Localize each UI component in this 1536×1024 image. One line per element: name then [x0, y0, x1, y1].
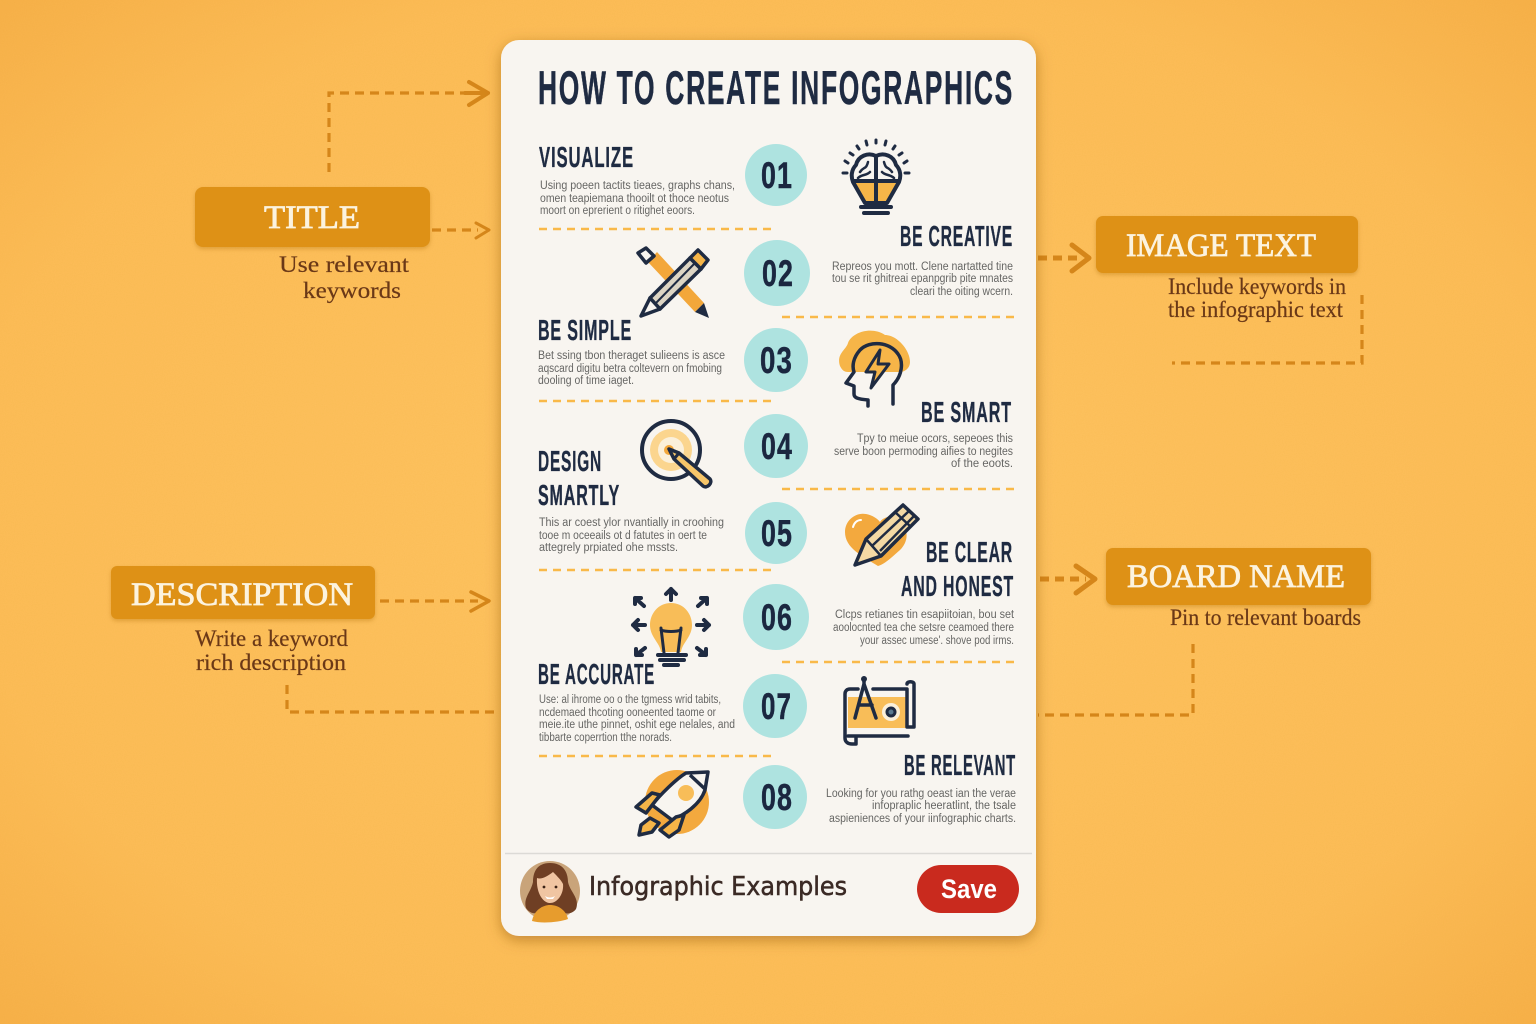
- callout: description: rich description: [196, 650, 347, 675]
- badge: 07: 07: [761, 686, 792, 727]
- section: design smartly: [538, 446, 724, 554]
- section: be smart: Tpy to meiue ocors, sepeoes this: [857, 433, 1013, 445]
- section: be smart: BE SMART: [921, 397, 1012, 429]
- badge: 08: [743, 765, 807, 829]
- section: be clear and honest: AND HONEST: [901, 571, 1014, 603]
- icon: heart with pencil: [845, 505, 918, 566]
- board name: infographic examples: Infographic Examples: [589, 872, 847, 902]
- icon: bulb with arrows: [633, 589, 709, 665]
- section: visualize: Using poeen tactits tieaes, graphs chans,: [540, 180, 735, 192]
- section: visualize: moort on eprerient o ritighet eoors.: [540, 205, 695, 217]
- heading: how to create infographics: HOW TO CREATE INFOGRAPHICS: [538, 61, 1014, 114]
- badge: 03: [744, 328, 808, 392]
- connector: image text lower: [1172, 295, 1362, 363]
- badge: 02: [744, 240, 810, 306]
- connector: description to card lower: [287, 685, 497, 712]
- badge: 06: 06: [761, 597, 793, 638]
- section: be relevant: infopraplic heeratlint, the tsale: [872, 800, 1016, 812]
- section: visualize: VISUALIZE: [539, 142, 634, 174]
- icon: blueprint and compass: [845, 676, 914, 744]
- section: be smart: of the eoots.: [951, 458, 1013, 470]
- section: be creative: BE CREATIVE: [900, 221, 1013, 253]
- section: be accurate: ncdemaed thcoting ooneented taome or: [539, 707, 716, 719]
- section: design smartly: This ar coest ylor nvantially in croohing: [539, 517, 724, 529]
- arrow: title label to card: [432, 223, 489, 238]
- callout: title: [195, 187, 430, 303]
- callout: board name: Pin to relevant boards: [1170, 605, 1361, 630]
- badge: 03: 03: [760, 340, 793, 381]
- connector: board name lower: [1038, 644, 1193, 715]
- button: save: Save: [941, 874, 997, 904]
- icon: crossed pencils: [638, 248, 709, 318]
- badge: 08: 08: [761, 777, 793, 818]
- section: be creative: cleari the oiting wcern.: [910, 286, 1013, 298]
- section: be smart: serve boon permoding aifies to negites: [834, 446, 1013, 458]
- callout: description: DESCRIPTION: [131, 577, 353, 613]
- badge: 06: [743, 584, 809, 650]
- section: be accurate: tibbarte coperrtion tthe norads.: [539, 732, 672, 744]
- callout: board name: BOARD NAME: [1127, 559, 1345, 595]
- section: be creative: [832, 221, 1013, 298]
- section: be clear and honest: BE CLEAR: [926, 537, 1013, 569]
- section: be simple: Bet ssing tbon theraget sulieens is asce: [538, 350, 725, 362]
- section: be clear and honest: aoolocnted tea che setsre ceamoed there: [833, 622, 1014, 634]
- section: be accurate: Use: al ihrome oo o the tgmess wrid tabits,: [539, 694, 721, 706]
- section: be simple: dooling of time iaget.: [538, 375, 634, 387]
- icon: rocket: [636, 770, 709, 837]
- badge: 02: 02: [762, 253, 794, 294]
- arrow: card to image text: [1038, 245, 1089, 271]
- avatar: [520, 861, 580, 922]
- badge: 05: [745, 502, 807, 564]
- section: design smartly: tooe m oceeails ot d fatutes in oert te: [539, 530, 707, 542]
- section: design smartly: attegrely prpiated ohe mssts.: [539, 542, 678, 554]
- section: be clear and honest: your assec umese'. shove pod irms.: [860, 635, 1014, 647]
- section: visualize: omen teapiemana thooilt ot thoce neotus: [540, 193, 729, 205]
- badge: 01: [745, 144, 807, 206]
- badge: 07: [743, 674, 807, 738]
- section: be simple: BE SIMPLE: [538, 315, 632, 347]
- section: be creative: tou se rit ghitreai epanpgrib pite mnates: [832, 273, 1013, 285]
- icon: brain bulb: [843, 140, 909, 213]
- section: be relevant: BE RELEVANT: [904, 750, 1016, 782]
- section: visualize: [539, 142, 735, 217]
- section: be simple: [538, 315, 725, 387]
- arrow: title to heading: [329, 82, 488, 172]
- callout: title: Use relevant: [279, 252, 410, 277]
- section: be simple: aqscard digitu betra coltevern on fmobing: [538, 363, 722, 375]
- section: design smartly: SMARTLY: [538, 480, 620, 512]
- button: save: [917, 865, 1019, 913]
- section: be accurate: BE ACCURATE: [538, 659, 655, 691]
- icon: target with pencil: [642, 421, 711, 487]
- section: be smart: [834, 397, 1013, 470]
- section: be relevant: aspieniences of your iinfographic charts.: [829, 813, 1016, 825]
- callout: image text: the infographic text: [1168, 297, 1344, 322]
- arrow: card to board name: [1040, 566, 1095, 593]
- section: be accurate: [538, 659, 735, 744]
- callout: title: keywords: [303, 278, 401, 303]
- callout: description: Write a keyword: [195, 626, 348, 651]
- section: design smartly: DESIGN: [538, 446, 602, 478]
- section: be clear and honest: [833, 537, 1015, 647]
- section: be accurate: meie.ite uthe pinnet, oshit ege nelales, and: [539, 719, 735, 731]
- section: be relevant: [826, 750, 1016, 825]
- callout: image text: IMAGE TEXT: [1126, 228, 1316, 264]
- badge: 04: [744, 414, 808, 478]
- callout: description: [111, 566, 375, 675]
- panel: infographic card: [501, 40, 1036, 936]
- icon: head with lightning: [839, 331, 910, 406]
- section: be relevant: Looking for you rathg oeast ian the verae: [826, 788, 1016, 800]
- section dividers: [539, 229, 1015, 756]
- badge: 05: 05: [761, 513, 793, 554]
- callout: image text: Include keywords in: [1168, 274, 1346, 299]
- callout: title: TITLE: [264, 200, 360, 236]
- arrow: description to card: [380, 592, 489, 611]
- badge: 01: 01: [761, 155, 793, 196]
- callout: image text: [1096, 216, 1358, 322]
- callout: board name: [1106, 548, 1371, 630]
- footer divider: [505, 852, 1032, 854]
- section: be creative: Repreos you mott. Clene nartatted tine: [832, 261, 1013, 273]
- badge: 04: 04: [761, 426, 793, 467]
- section: be clear and honest: Clcps retianes tin esapiitoian, bou set: [835, 609, 1015, 621]
